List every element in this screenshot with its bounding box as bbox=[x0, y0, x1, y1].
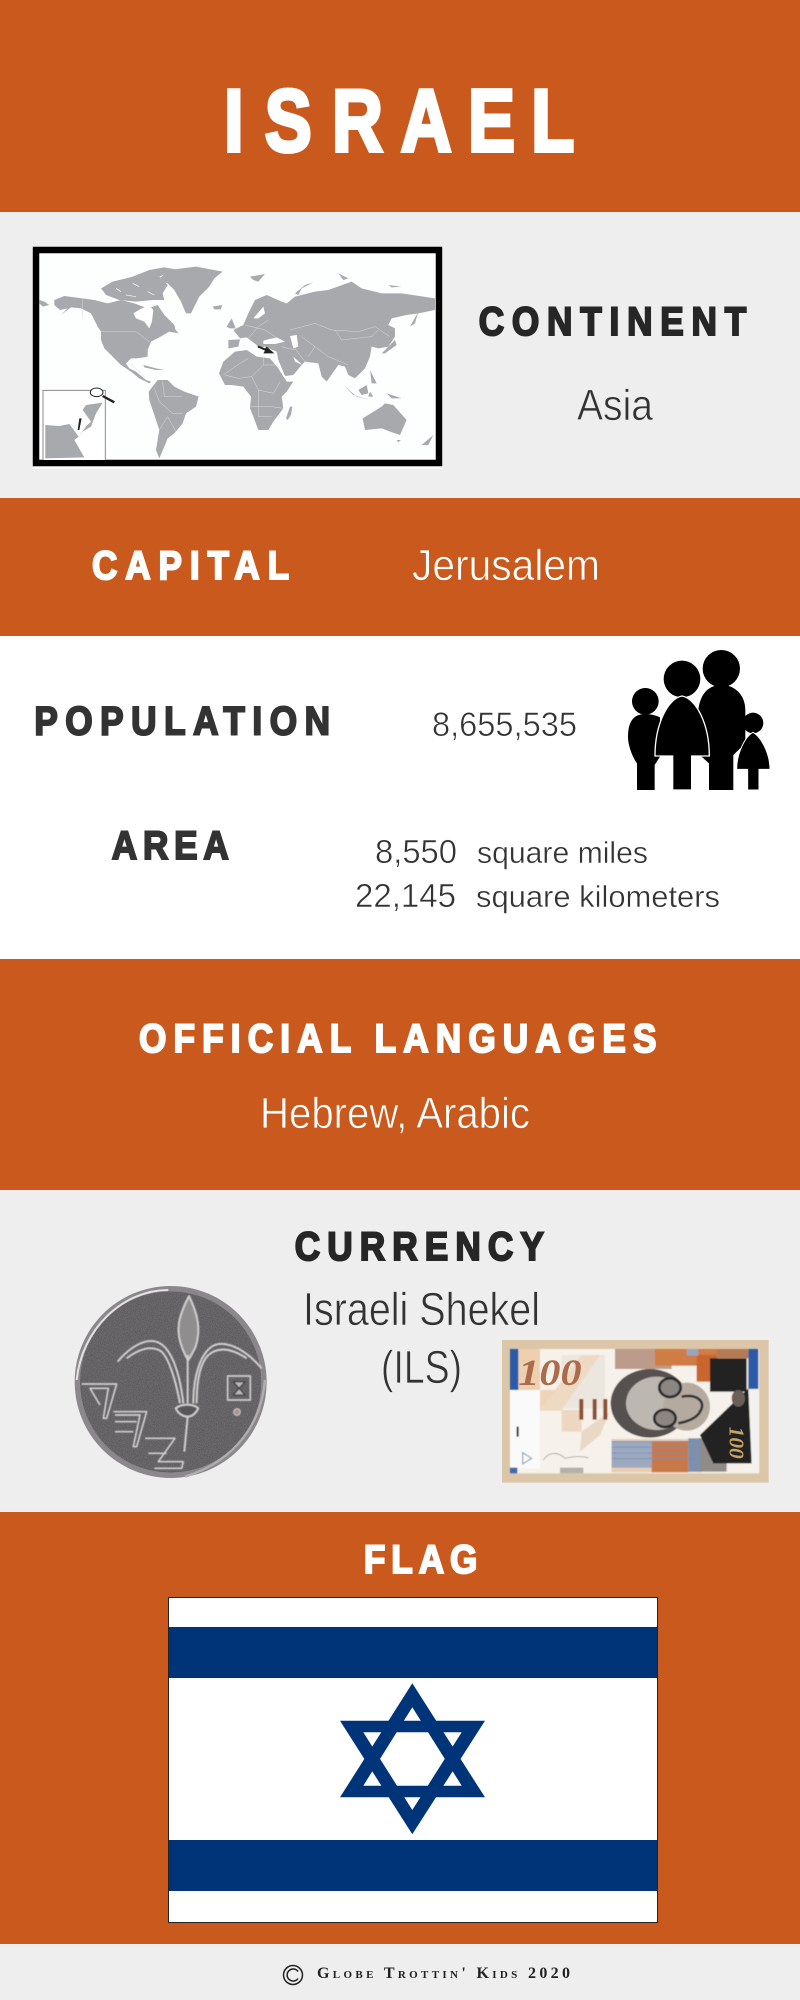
heading: currency: CURRENCY bbox=[295, 1224, 544, 1268]
value: Asia: Asia bbox=[577, 381, 653, 430]
heading: flag: FLAG bbox=[364, 1537, 477, 1581]
value: Israeli Shekel: Israeli Shekel bbox=[303, 1283, 540, 1335]
panel: title band bbox=[0, 0, 800, 212]
map: Old World bbox=[215, 273, 435, 445]
heading: population: POPULATION bbox=[34, 698, 330, 743]
arrow bbox=[258, 346, 274, 353]
heading: official languages: OFFICIAL LANGUAGES bbox=[139, 1016, 656, 1060]
credit: Globe Trottin' Kids 2020 bbox=[317, 1965, 570, 1982]
copyright symbol bbox=[284, 1966, 302, 1984]
value: area in square kilometers: square kilometers bbox=[476, 879, 720, 914]
panel: continent bbox=[0, 212, 800, 498]
panel: flag bbox=[0, 1512, 800, 1944]
image: 100 shekel banknote: 100 bbox=[518, 1353, 582, 1394]
value: area in square miles: square miles bbox=[477, 835, 648, 870]
image: 100 shekel banknote bbox=[502, 1340, 769, 1483]
value: area in square miles bbox=[375, 833, 648, 870]
value: Jerusalem: Jerusalem bbox=[412, 541, 600, 590]
magnifier bbox=[90, 388, 114, 402]
footer bbox=[0, 1944, 800, 2000]
value: area in square kilometers: 22,145 bbox=[355, 877, 456, 914]
panel: currency bbox=[0, 1190, 800, 1512]
map: Americas bbox=[39, 267, 223, 460]
heading: area: AREA bbox=[112, 823, 229, 867]
image: 100 shekel banknote: 100 bbox=[724, 1427, 748, 1459]
icon: one shekel coin bbox=[75, 1286, 267, 1478]
icon: family bbox=[628, 650, 770, 790]
panel: official languages bbox=[0, 959, 800, 1190]
star of David bbox=[340, 1683, 485, 1834]
value: languages: Hebrew, Arabic bbox=[260, 1089, 530, 1138]
world map bbox=[32, 247, 443, 469]
title: ISRAEL bbox=[224, 71, 574, 170]
inset map bbox=[43, 390, 105, 460]
panel: population and area bbox=[0, 636, 800, 959]
value: ILS: (ILS) bbox=[381, 1341, 462, 1393]
heading: capital: CAPITAL bbox=[92, 543, 289, 587]
value: area in square kilometers bbox=[355, 877, 720, 914]
panel: capital bbox=[0, 498, 800, 636]
value: population: 8,655,535 bbox=[432, 706, 577, 744]
heading: continent: CONTINENT bbox=[479, 299, 746, 343]
value: area in square miles: 8,550 bbox=[375, 833, 457, 870]
flag of Israel bbox=[168, 1598, 658, 1922]
